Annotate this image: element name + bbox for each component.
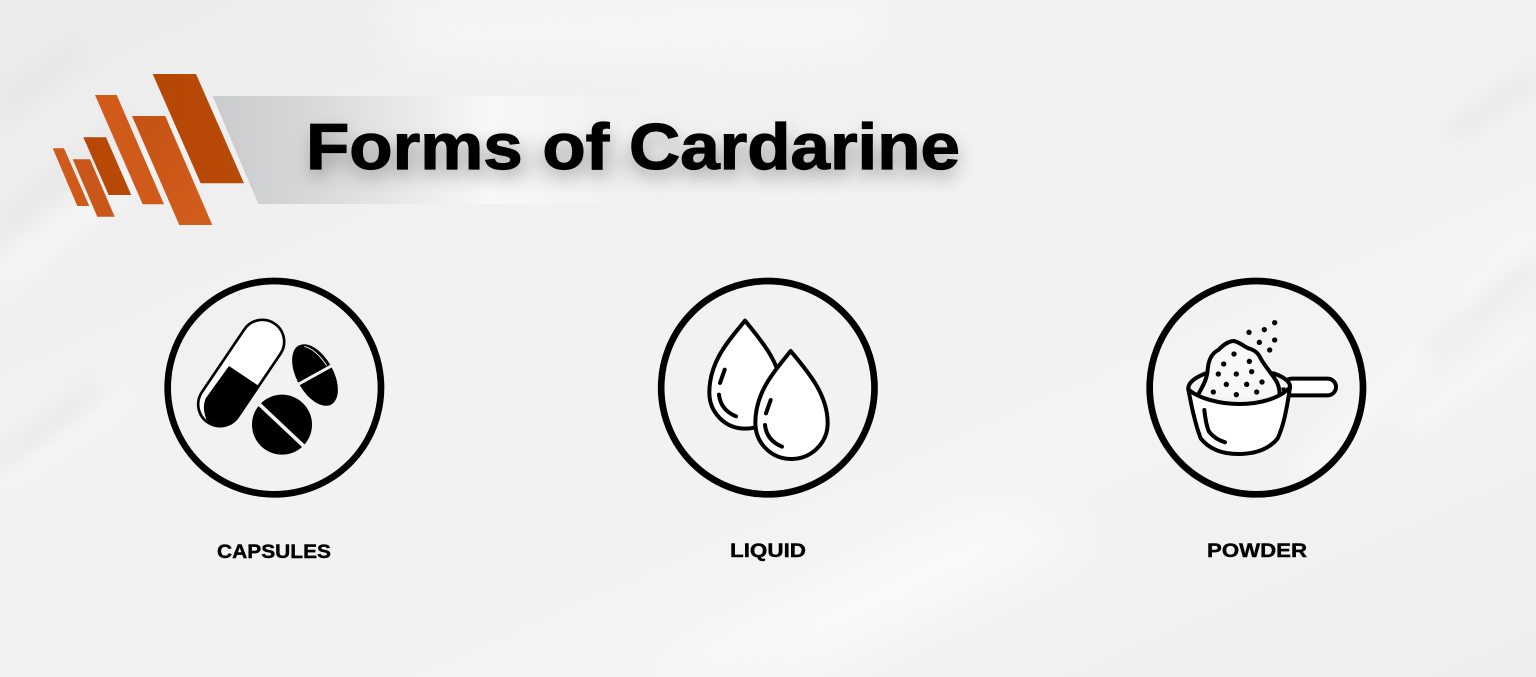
banner: grey ribbon (213, 96, 660, 204)
label: liquid: LIQUID (730, 541, 806, 562)
banner glow (310, 150, 950, 174)
panel: liquid (661, 281, 874, 562)
icon: liquid drops in circle (661, 281, 874, 494)
icon: powder scoop in circle (1150, 281, 1363, 494)
panel: powder (1150, 281, 1363, 562)
title banner (213, 96, 960, 204)
label: capsules: CAPSULES (217, 542, 331, 563)
logo: orange bars (53, 74, 244, 225)
panel: capsules (168, 281, 381, 563)
icon: capsules in circle (168, 281, 381, 494)
label: powder: POWDER (1207, 541, 1307, 562)
title: Forms of Cardarine (306, 110, 960, 183)
